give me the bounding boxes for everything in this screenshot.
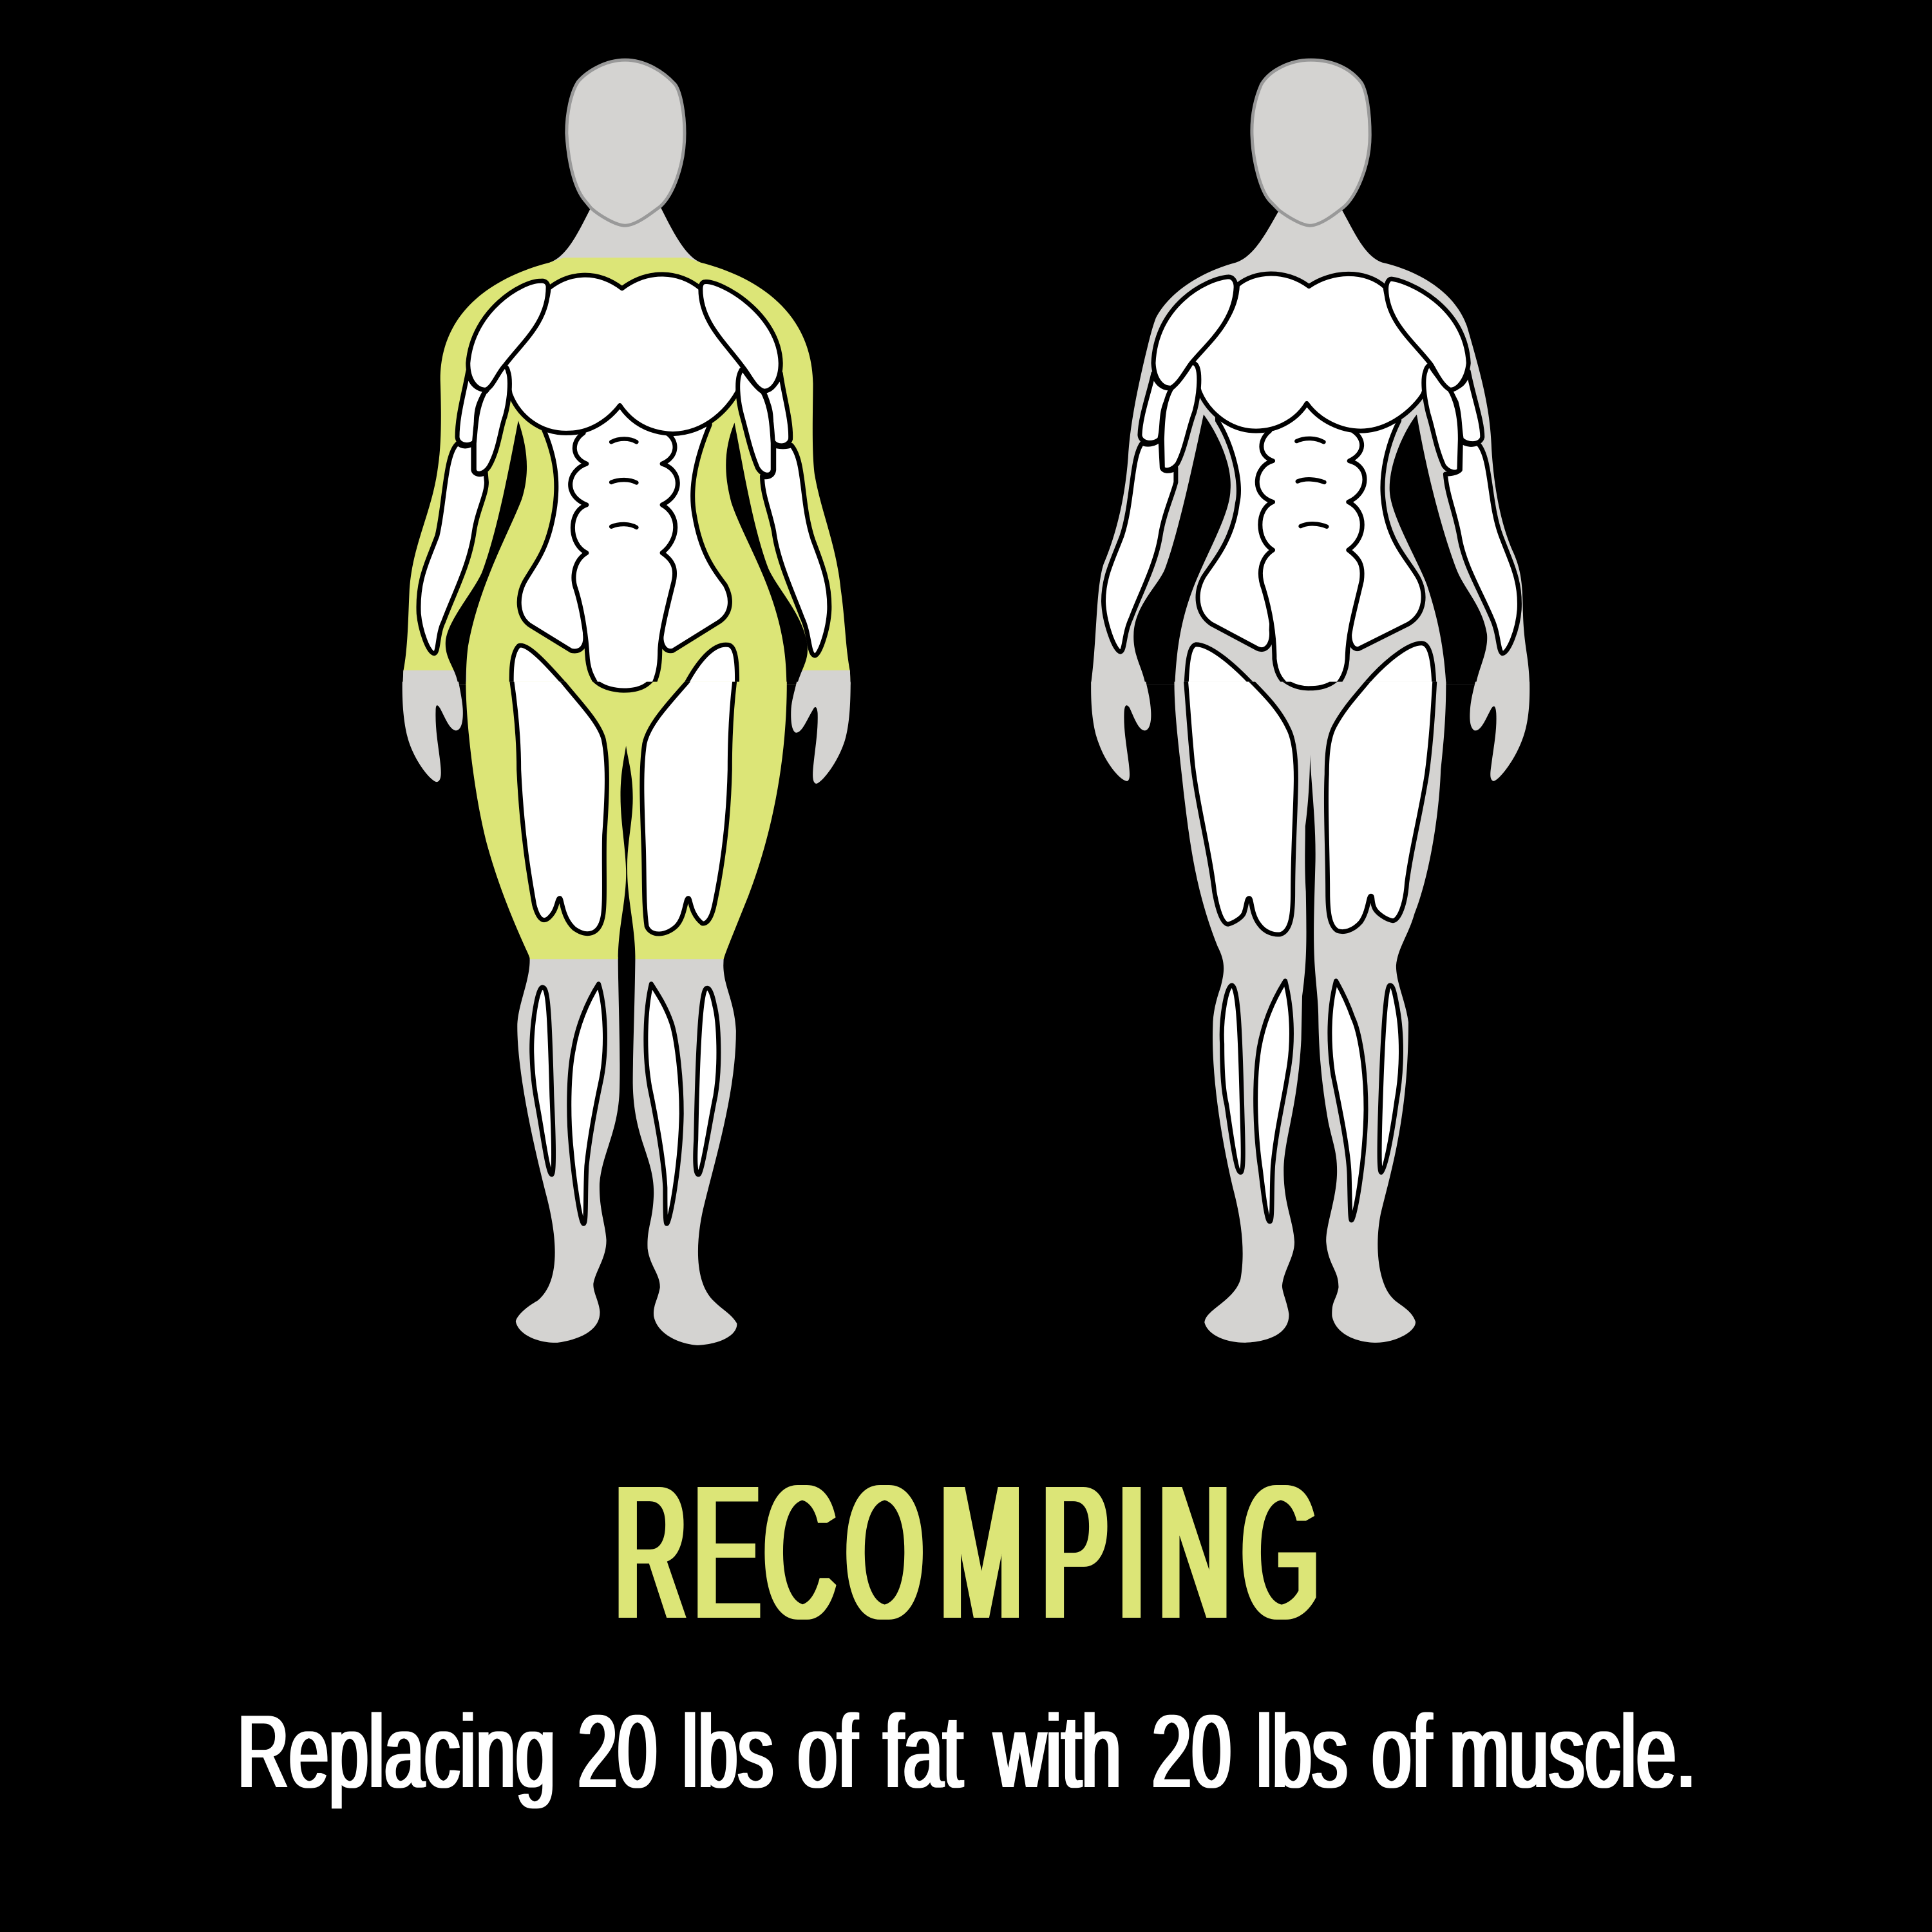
lower body [402, 665, 851, 1345]
head [1252, 60, 1370, 225]
left hand [1091, 678, 1151, 781]
left shoulder [1153, 277, 1236, 388]
subtitle: muscle. [1450, 1694, 1696, 1810]
right outer calf [696, 988, 719, 1175]
left forearm [1103, 439, 1176, 652]
right hand [1470, 678, 1530, 781]
right thigh [642, 665, 736, 934]
left thigh top [509, 643, 565, 682]
left outer upper arm [1140, 374, 1172, 442]
abdominals bottom [1276, 670, 1344, 688]
subtitle: 20 [578, 1694, 658, 1810]
figure: after recomping, lean body [1091, 60, 1530, 1343]
right outer calf [1379, 985, 1401, 1172]
subtitle: with [994, 1694, 1121, 1810]
gap between left arm and torso [1133, 415, 1231, 712]
left oblique [516, 430, 585, 653]
abdominal tick lines [1296, 439, 1327, 527]
abdominals [1257, 396, 1365, 712]
right thigh top [685, 643, 739, 682]
chest [505, 274, 743, 434]
right shoulder [1387, 279, 1468, 390]
chest [1191, 274, 1432, 431]
silhouette hips and left leg [1174, 665, 1310, 1343]
gray left wrist [403, 670, 466, 685]
right inner calf [1330, 981, 1366, 1220]
right shoulder [701, 282, 781, 391]
subtitle: lbs [1256, 1694, 1348, 1810]
fat layer: hips and thighs [466, 665, 787, 959]
abdominals bottom [589, 670, 658, 690]
left inner calf [1256, 981, 1291, 1222]
lower body [1091, 665, 1530, 1343]
right forearm [762, 445, 829, 656]
left forearm [419, 443, 486, 654]
neck [549, 207, 701, 263]
subtitle: of [798, 1694, 858, 1810]
left thigh top [1185, 645, 1273, 712]
left biceps [1162, 363, 1199, 470]
right biceps [738, 369, 773, 475]
fat layer: upper torso and arms [402, 258, 851, 712]
subtitle: 20 [1151, 1694, 1231, 1810]
gap between left arm and torso [446, 421, 527, 712]
left hand [402, 678, 463, 782]
upper body [402, 60, 851, 712]
left biceps [474, 366, 509, 473]
right biceps [1424, 365, 1460, 472]
right forearm [1445, 441, 1519, 654]
left thigh [1185, 665, 1296, 934]
right leg below knee [633, 957, 737, 1345]
head [567, 60, 685, 225]
left outer calf [1222, 985, 1243, 1172]
left outer upper arm [457, 372, 486, 445]
subtitle: of [1372, 1694, 1432, 1810]
silhouette hips and right leg [1309, 665, 1446, 1343]
gap between right arm and torso [726, 422, 808, 712]
figure: before recomping, fat highlighted [402, 60, 851, 1345]
left shoulder [468, 281, 548, 390]
subtitle: Replacing [237, 1694, 555, 1810]
subtitle [237, 1694, 1696, 1810]
left leg below knee [516, 957, 620, 1343]
right oblique [1341, 400, 1423, 649]
title: RECOMPING [615, 1446, 1319, 1658]
right inner calf [646, 984, 681, 1224]
left inner calf [569, 984, 605, 1224]
right thigh [1326, 665, 1435, 932]
abdominals [571, 400, 677, 712]
left outer calf [532, 987, 554, 1175]
subtitle: fat [884, 1694, 963, 1810]
right outer upper arm [762, 374, 791, 446]
subtitle: lbs [682, 1694, 773, 1810]
gap between right arm and torso [1390, 415, 1487, 712]
right hand [791, 678, 851, 784]
right outer upper arm [1449, 372, 1482, 444]
left oblique [1198, 400, 1279, 650]
abdominal tick lines [611, 439, 636, 527]
gray right wrist [787, 670, 851, 685]
right thigh top [1347, 643, 1435, 712]
upper body [1091, 60, 1530, 712]
left thigh [511, 665, 607, 934]
right oblique [658, 404, 730, 651]
silhouette upper [1091, 211, 1530, 712]
